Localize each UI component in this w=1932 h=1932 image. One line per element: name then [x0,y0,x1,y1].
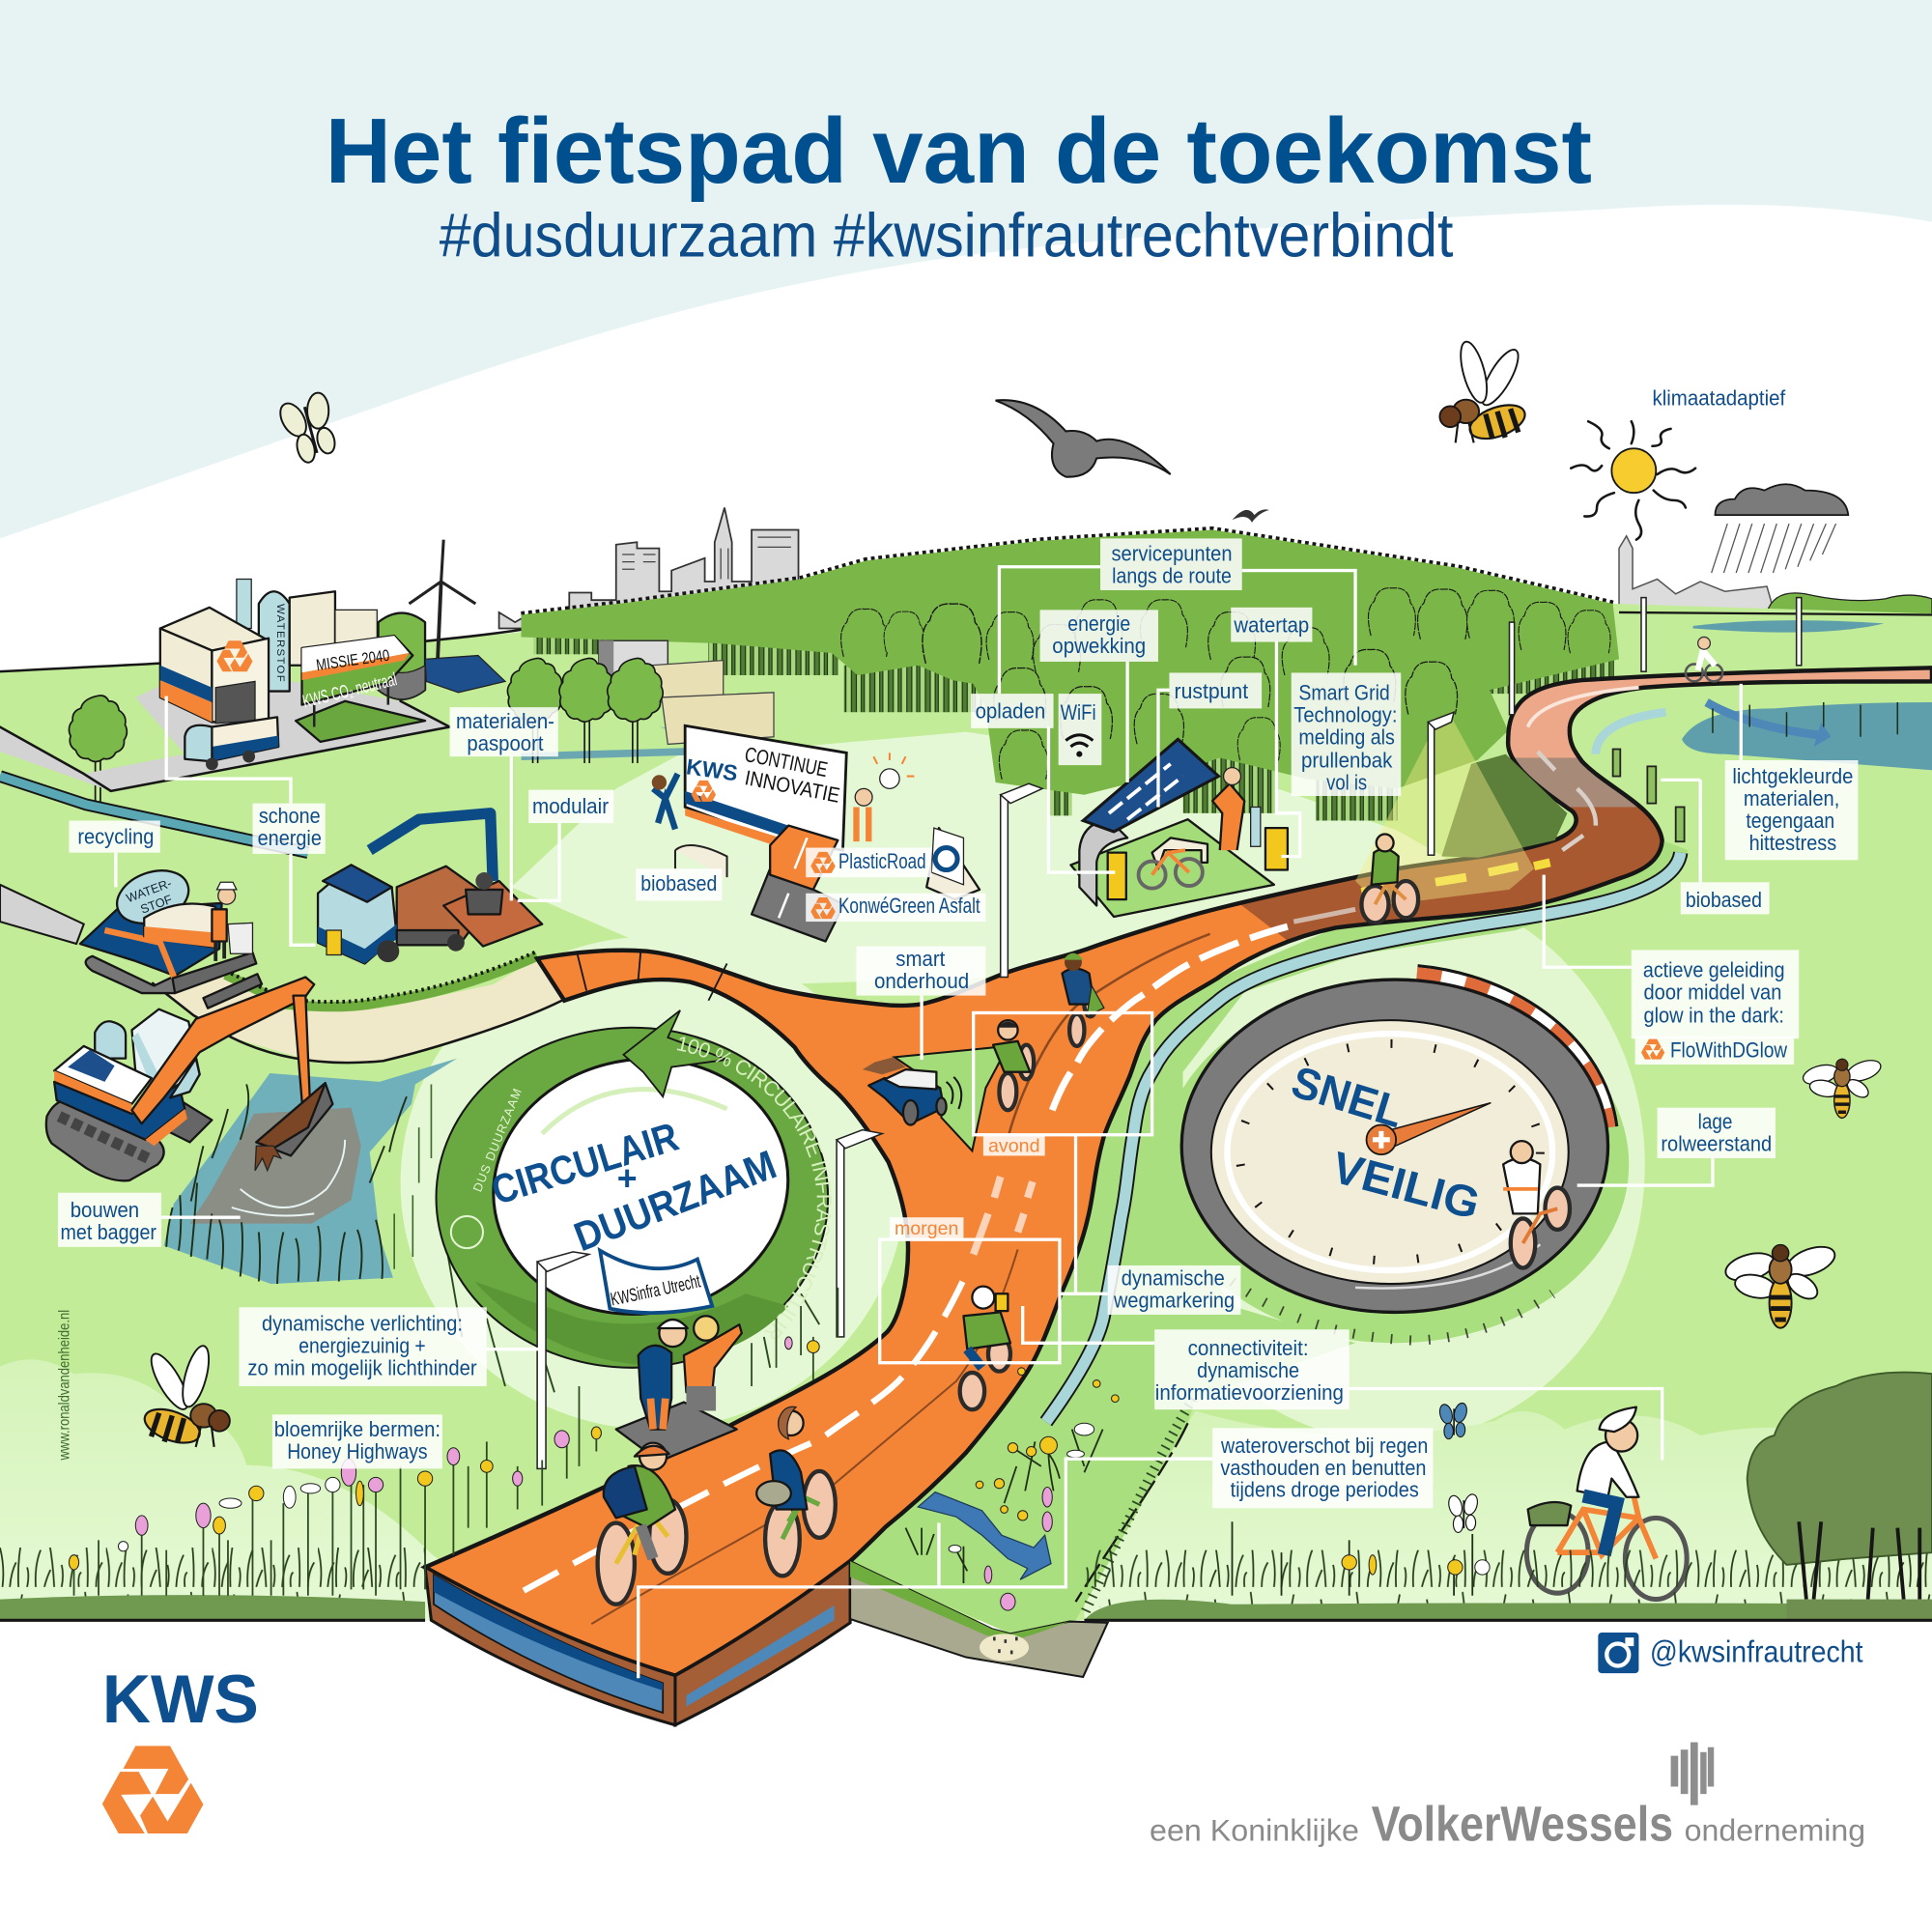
label: lichtgekleurde materialen [1725,760,1858,860]
label: lichtgekleurde materialen: tegengaan [1746,809,1834,833]
label: energie opwekking [1040,610,1158,662]
label: wateroverschot: vasthouden en benutten [1220,1456,1426,1480]
cyclists [598,637,1722,1605]
bollards [1613,750,1685,841]
needle [1386,1103,1491,1149]
small bird [1233,509,1269,523]
label: rustpunt [1169,672,1262,708]
label: Smart Grid: Smart Grid [1298,680,1390,704]
gauge: SNEL [1286,1056,1409,1137]
orange excavator [46,974,332,1180]
label: connectiviteit: dynamische [1197,1358,1299,1382]
innovation sign: KWS [685,753,739,786]
mower [863,1057,961,1125]
grey roads and canal [0,666,450,944]
VolkerWessels logo mark [1671,1743,1714,1805]
label: biobased left [636,868,722,900]
big bee [1439,339,1529,445]
label: materialen-paspoort: materialen- [456,709,554,733]
big cyclist [1526,1407,1687,1600]
label: opladen: opladen [976,699,1045,724]
roundabout ring: + [617,1159,638,1198]
label: actieve geleiding [1632,950,1799,1038]
label: wateroverschot: tijdens droge periodes [1231,1478,1419,1502]
label: smart onderhoud: onderhoud [874,969,969,993]
subtitle hashtags: #dusduurzaam #kwsinfrautrechtverbindt [440,200,1454,270]
ground field [0,604,1932,1620]
label: bloemrijke bermen: bloemrijke bermen: [274,1417,440,1441]
instagram icon [1598,1633,1638,1673]
road front section [425,1561,850,1725]
label: lichtgekleurde materialen: lichtgekleurde [1732,764,1853,788]
roundabout ring: 100 % CIRCULAIRE INFRASTRUCTUUR [676,1037,832,1340]
label: Smart Grid: Technology: [1293,702,1397,726]
bagger pond [164,1059,457,1284]
label: morgen: morgen [895,1219,958,1239]
cyclist with phone [960,1287,1010,1409]
ring arrow [623,1010,727,1096]
cyclist gauge [1503,1141,1570,1267]
label: servicepunten [1100,538,1242,590]
green bank around gauge [850,840,1688,1634]
label: lichtgekleurde materialen: hittestress [1749,831,1836,855]
roundabout ring: DUS DUURZAAM [469,1086,525,1194]
background sky [0,0,1932,538]
instagram handle: @kwsinfrautrecht [1650,1634,1863,1669]
label: avond: avond [988,1137,1040,1157]
label: actieve geleiding: door middel van [1644,980,1781,1004]
label: actieve geleiding: actieve geleiding [1643,957,1785,981]
label: PlasticRoad [806,848,931,877]
label: materialen-paspoort [450,707,558,756]
label: watertap: watertap [1234,612,1309,637]
road samples [752,826,980,941]
label: watertap [1231,608,1312,642]
label: bloemrijke bermen: Honey Highways [287,1439,428,1463]
butterfly top left [273,387,345,468]
two people on plaza [616,1316,742,1462]
sign CO2 neutraal [296,636,425,742]
label: schone energie: energie [258,826,322,850]
flag [600,1251,712,1313]
label: Smart Grid: melding als [1298,724,1395,749]
label: FloWithDGlow [1635,1037,1794,1065]
hydrogen recycler: WATER- [125,875,174,905]
wildflowers left [69,1288,838,1596]
animals and weather [140,339,1884,1532]
label: bouwen met bagger: bouwen [71,1198,139,1222]
label: dynamische wegmarkering [1108,1265,1240,1315]
big bird [996,400,1171,477]
wildflowers road side [906,1368,1490,1610]
title: Het fietspad van de toekomst [326,99,1592,203]
VolkerWessels line: onderneming [1685,1813,1865,1848]
connector lines [116,567,1741,1678]
label: recycling [69,820,160,853]
label: servicepunten: servicepunten [1112,541,1233,565]
hydrogen recycler [80,862,256,993]
cyclist glow road [1361,835,1418,923]
label: lage rolweerstand: lage [1698,1109,1732,1133]
blue excavator [318,813,542,963]
gauge: VEILIG [1327,1142,1486,1229]
label: recycling: recycling [77,825,154,849]
lamps [537,598,1802,1468]
sandy path [153,952,562,1064]
label: wateroverschot [1212,1428,1433,1508]
label: klimaatadaptief: klimaatadaptief [1652,386,1786,411]
label: Smart Grid [1292,672,1401,796]
label: energie opwekking: energie [1067,611,1130,636]
label: biobased right: biobased [1686,888,1762,912]
label: KonweGreen Asfalt [806,894,985,922]
label: modulair [528,790,613,823]
tree left [69,696,127,805]
roundabout ring: DUURZAAM [568,1142,782,1260]
sun [1571,421,1695,540]
label: biobased left: biobased [640,871,717,895]
label: Smart Grid: vol is [1326,771,1367,795]
church skyline right [1619,536,1775,612]
label: dynamische verlichting: zo min mogelijk lichthinder [247,1355,477,1379]
label: WiFi with icon: WiFi [1061,700,1096,724]
label: opladen [971,694,1054,728]
label: bouwen met bagger [58,1193,161,1247]
artist credit: www.ronaldvandenheide.nl [56,1310,72,1461]
skyline [499,508,815,629]
solar charging stop [1070,739,1288,917]
VolkerWessels line: VolkerWessels [1372,1797,1673,1852]
soil block [850,1561,1108,1677]
dark tree right [1747,1373,1932,1620]
factory: WATERSTOF [274,604,286,683]
bees [1801,1057,1884,1118]
label: dynamische verlichting [239,1307,487,1386]
KWS logo [102,1746,203,1833]
label: bloemrijke bermen [272,1414,442,1468]
rain cloud [1712,484,1848,573]
road [430,670,1930,1673]
label: Smart Grid: prullenbak [1301,749,1393,773]
label: connectiviteit [1154,1329,1350,1409]
cyclist woman [756,1406,836,1576]
KWS wordmark: KWS [102,1661,259,1737]
label: energie opwekking: opwekking [1052,634,1146,658]
label: actieve geleiding: glow in the dark: [1644,1004,1784,1028]
label: wateroverschot: wateroverschot bij regen [1220,1434,1428,1458]
sign CO2 neutraal: MISSIE 2040 [315,646,391,674]
innovation sign: CONTINUE [743,742,830,781]
label: connectiviteit: informatievoorziening [1155,1380,1344,1405]
road island [895,1046,1008,1151]
label: lichtgekleurde materialen: materialen, [1744,786,1839,810]
label: materialen-paspoort: paspoort [467,731,544,755]
small grey building and reeds [522,640,801,756]
label: schone energie [252,804,326,854]
bottom grass strip right [1084,1550,1932,1620]
label: WiFi with icon [1059,694,1101,765]
label: FloWithDGlow: FloWithDGlow [1670,1037,1788,1062]
roundabout ring [435,1009,832,1393]
VolkerWessels line [1150,1797,1865,1852]
cyclist green [993,1020,1034,1110]
blue canal [1046,853,1681,1422]
sign CO2 neutraal: KWS CO₂ neutraal [300,669,399,713]
hydrogen recycler: STOF [138,892,174,917]
label: biobased right [1681,882,1770,914]
innovation sign [652,725,914,877]
wind turbine [409,540,475,666]
butterflies [1437,1402,1468,1439]
road centre lines [524,688,1638,1624]
VolkerWessels line: een Koninklijke [1150,1813,1359,1848]
gauge [1181,974,1609,1312]
forest [522,529,1619,820]
innovation sign: INNOVATIE [743,765,842,808]
label: smart onderhoud: smart [895,947,946,971]
electric truck [185,717,278,770]
bottom grass strip left [0,1548,425,1620]
label: schone energie: schone [259,804,321,828]
pale glow areas [0,732,1932,1620]
solar panels [425,656,505,693]
ring text [675,1050,817,1350]
label: KonweGreen Asfalt: KonwéGreen Asfalt [838,894,980,918]
label: dynamische verlichting: dynamische verlichting: [262,1312,463,1336]
small far cyclist [1686,637,1722,681]
forest shadow and lamp beam [1355,717,1567,906]
roundabout ring: KWSinfra Utrecht [609,1271,702,1311]
row of trees [507,658,663,763]
label: PlasticRoad: PlasticRoad [838,849,926,873]
water flow arrow [918,1492,1051,1579]
far pond [1596,620,1932,770]
label: lage rolweerstand [1658,1108,1776,1158]
circulair text: CIRCULAIR [486,1114,683,1213]
label: bouwen met bagger: met bagger [60,1220,156,1244]
factory [160,579,425,724]
label: servicepunten: langs de route [1112,563,1232,587]
label: rustpunt: rustpunt [1175,679,1249,703]
label: dynamische verlichting: energiezuinig + [298,1334,426,1358]
label: dynamische wegmarkering: dynamische [1122,1265,1225,1290]
label: dynamische wegmarkering: wegmarkering [1113,1288,1235,1312]
label: connectiviteit: connectiviteit: [1188,1336,1309,1360]
cyclist blue backpack [598,1443,686,1605]
ground line [0,1619,1932,1621]
far hedge right [1767,593,1932,616]
label: lage rolweerstand: rolweerstand [1661,1131,1772,1155]
label: smart onderhoud [856,947,985,996]
label: modulair: modulair [532,794,610,818]
road outline [425,668,1932,1676]
cyclist dark [1062,953,1104,1046]
